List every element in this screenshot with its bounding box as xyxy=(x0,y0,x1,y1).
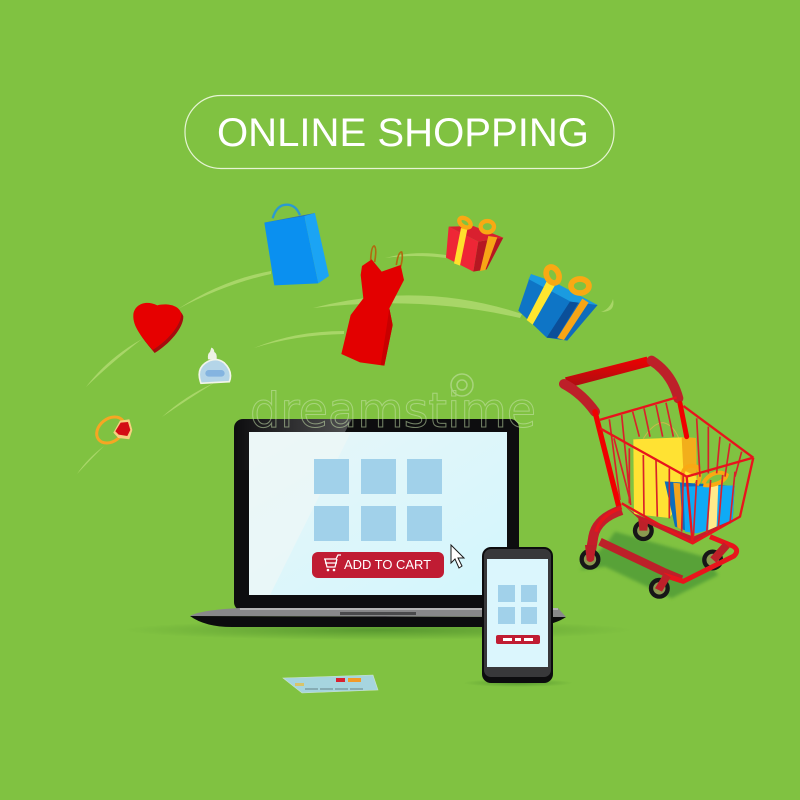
cart shadow xyxy=(580,532,718,598)
add to cart button: ADD TO CART xyxy=(344,557,431,572)
icon: red gift box xyxy=(446,216,503,272)
title pill xyxy=(185,96,614,168)
left wheel xyxy=(582,545,598,568)
smartphone xyxy=(482,547,553,683)
phone screen xyxy=(487,559,548,667)
icon: perfume bottle xyxy=(199,348,231,383)
floor shadow xyxy=(123,620,633,640)
right wheel xyxy=(704,552,721,568)
icon: red heart xyxy=(133,303,183,353)
icon: ring xyxy=(92,412,132,448)
shopping cart xyxy=(564,357,753,598)
gift box in cart xyxy=(665,466,735,533)
laptop lid xyxy=(234,419,519,611)
cart handle ends xyxy=(564,361,687,506)
front wheel xyxy=(651,573,671,597)
motion trails xyxy=(77,253,614,474)
cart handle bar xyxy=(565,357,651,388)
cart tray xyxy=(622,503,740,545)
shopping bag in cart xyxy=(633,423,697,518)
product grid xyxy=(314,459,442,541)
cart base frame xyxy=(590,508,737,581)
bow xyxy=(458,216,494,232)
cart basket wires xyxy=(609,403,742,538)
icon: mouse cursor xyxy=(451,545,464,568)
title text: ONLINE SHOPPING xyxy=(217,111,589,155)
cart rim xyxy=(599,397,753,543)
back wheel xyxy=(635,518,652,539)
phone product grid xyxy=(498,585,537,624)
watermark: dreamstime xyxy=(250,383,536,439)
phone shadow xyxy=(463,679,573,687)
laptop screen xyxy=(249,432,507,595)
laptop xyxy=(190,419,566,627)
icon: blue gift box xyxy=(518,265,598,341)
credit card xyxy=(283,675,378,693)
laptop base xyxy=(190,616,566,627)
icon: red dress xyxy=(341,246,404,366)
add to cart button xyxy=(312,552,444,578)
phone button xyxy=(496,635,540,644)
icon: blue shopping bag xyxy=(264,205,329,285)
bow xyxy=(544,265,589,293)
icon: cart xyxy=(324,555,341,567)
